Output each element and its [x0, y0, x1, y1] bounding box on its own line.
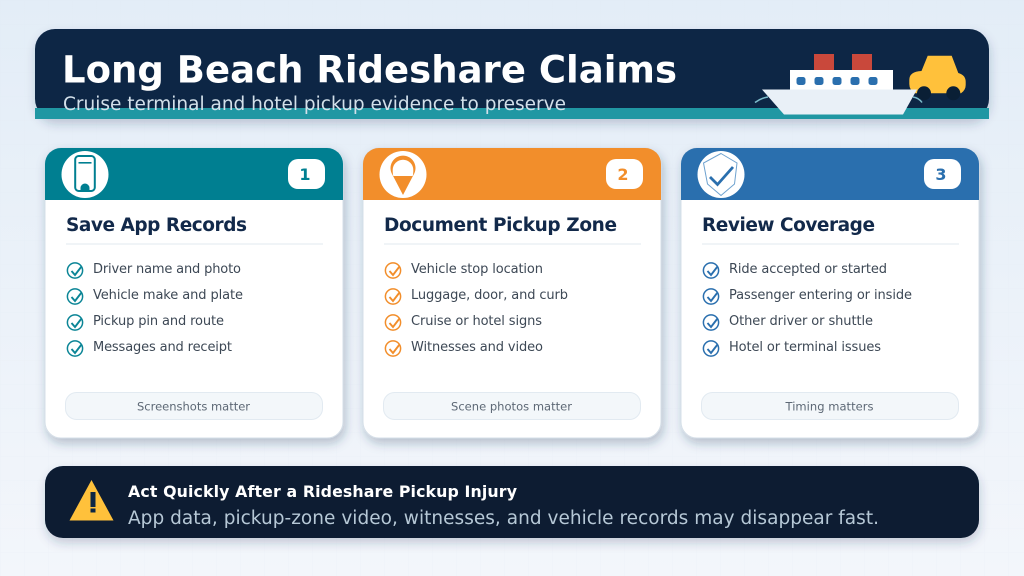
panel header: blue — [681, 148, 979, 200]
icon: map pin — [380, 151, 426, 198]
checklist — [703, 262, 912, 356]
checklist: Cruise or hotel signs — [411, 314, 542, 329]
icon: cruise ship — [755, 54, 922, 114]
footer pill — [384, 392, 640, 420]
panel header: teal — [45, 148, 343, 200]
callout heading: Act Quickly After a Rideshare Pickup Injury — [128, 482, 518, 501]
panel: review coverage — [681, 148, 979, 438]
footer pill — [66, 392, 322, 420]
checklist: Messages and receipt — [93, 340, 232, 355]
checklist: Other driver or shuttle — [729, 314, 873, 329]
footer pill: Screenshots matter — [137, 400, 250, 414]
number badge 1: 1 — [299, 165, 311, 184]
title: Long Beach Rideshare Claims — [62, 48, 677, 92]
number badge 2 — [606, 159, 643, 189]
checklist — [385, 262, 568, 356]
heading: Save App Records — [66, 215, 247, 236]
icon: shield check — [698, 151, 744, 198]
number badge 2: 2 — [617, 165, 629, 184]
checklist — [67, 262, 243, 356]
number badge 3: 3 — [935, 165, 947, 184]
panel: save app records — [45, 148, 343, 438]
checklist: Ride accepted or started — [729, 262, 887, 277]
footer pill: Timing matters — [784, 400, 874, 414]
header banner — [35, 29, 989, 119]
heading: Review Coverage — [702, 215, 875, 236]
icon: phone — [62, 151, 108, 198]
icon: yellow car — [909, 56, 966, 100]
callout: act quickly — [45, 466, 979, 538]
number badge 3 — [924, 159, 961, 189]
footer pill — [702, 392, 958, 420]
number badge 1 — [288, 159, 325, 189]
checklist: Passenger entering or inside — [729, 288, 912, 303]
checklist: Vehicle make and plate — [93, 288, 243, 303]
panel: document pickup zone — [363, 148, 661, 438]
checklist: Witnesses and video — [411, 340, 543, 355]
heading: Document Pickup Zone — [384, 215, 617, 236]
panel header: orange — [363, 148, 661, 200]
subtitle: Cruise terminal and hotel pickup evidence to preserve — [63, 94, 566, 115]
icon: warning triangle — [70, 480, 114, 520]
checklist: Pickup pin and route — [93, 314, 224, 329]
checklist: Driver name and photo — [93, 262, 241, 277]
callout text: App data, pickup-zone video, witnesses, and vehicle records may disappear fast. — [128, 508, 879, 529]
checklist: Vehicle stop location — [411, 262, 543, 277]
checklist: Hotel or terminal issues — [729, 340, 881, 355]
checklist: Luggage, door, and curb — [411, 288, 568, 303]
footer pill: Scene photos matter — [451, 400, 572, 414]
